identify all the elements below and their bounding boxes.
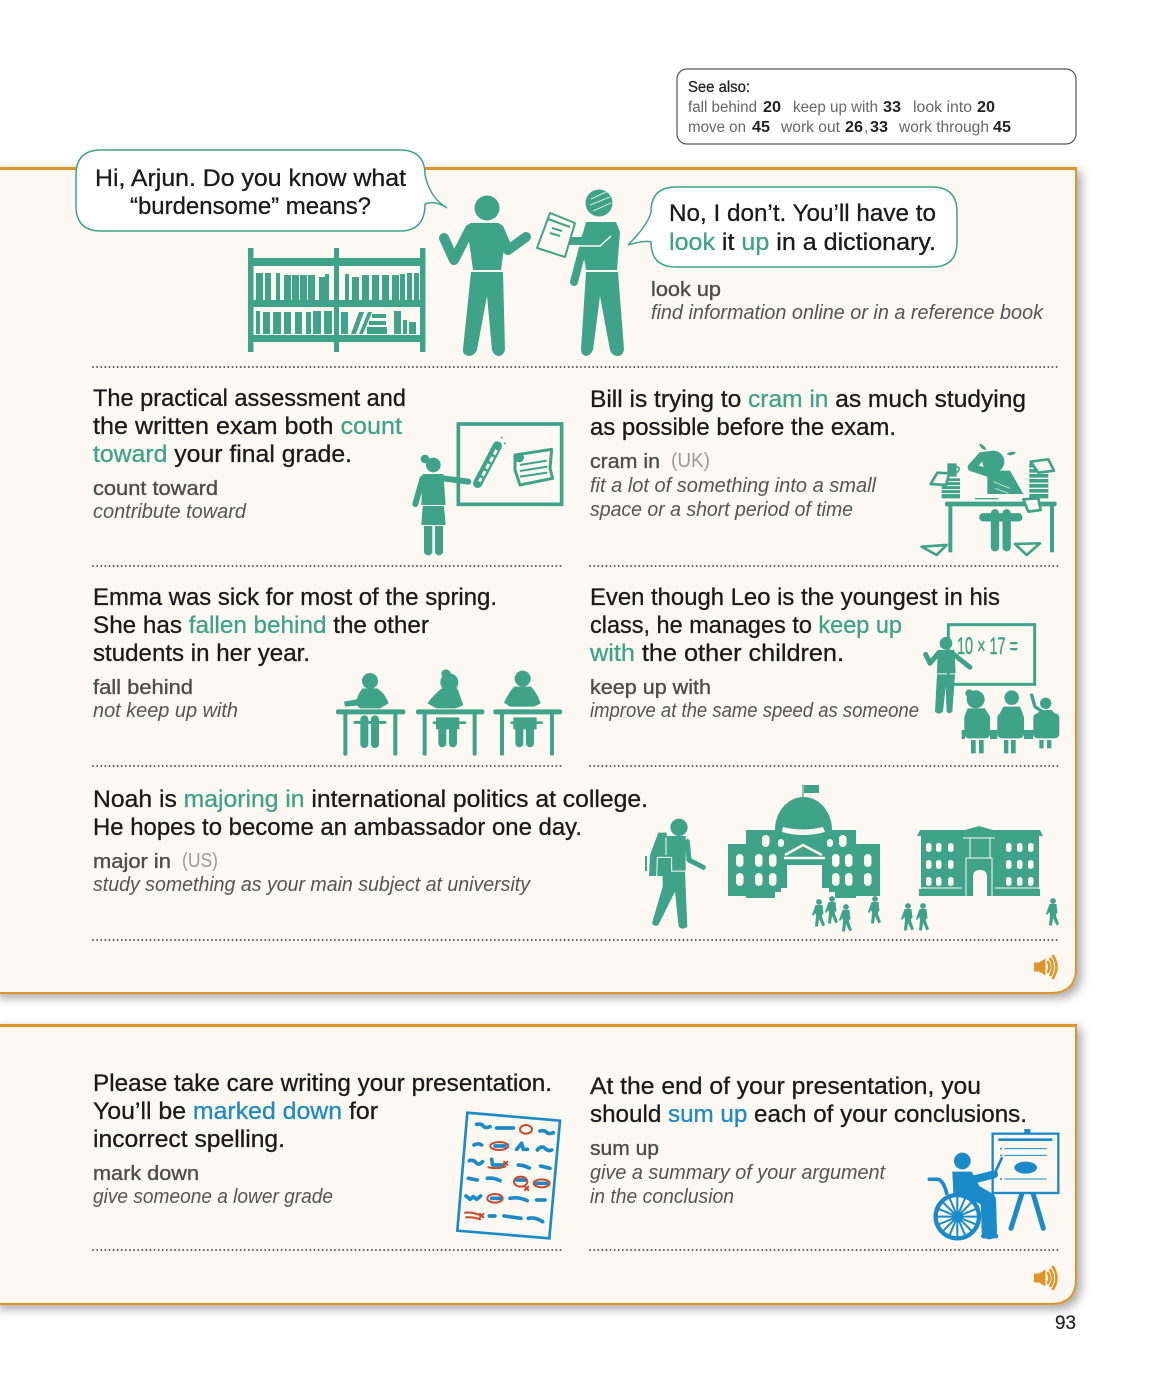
see also box: work through	[898, 119, 989, 136]
text block: keep up with: improve at the same speed as someone	[590, 700, 919, 722]
icon: stressed student at desk	[922, 443, 1057, 555]
text block: keep up with: Even though Leo is the youngest in his	[590, 584, 1000, 611]
text block: sum up: give a summary of your argument	[590, 1162, 886, 1184]
icon: small students walking	[812, 896, 1059, 932]
see also box: fall behind	[688, 99, 757, 116]
text block: sum up: in the conclusion	[590, 1186, 734, 1208]
see also box: 45	[752, 119, 770, 136]
icon: student with backpack	[645, 819, 703, 929]
definition: look up: look up	[651, 279, 721, 301]
speech bubble: Hi, Arjun: “burdensome” means?	[130, 193, 371, 220]
text block: cram in: fit a lot of something into a small	[590, 475, 877, 497]
icon: college building	[917, 826, 1043, 896]
text block: major in	[93, 786, 648, 896]
text block: cram in	[590, 386, 1026, 521]
text block: sum up	[590, 1073, 1027, 1208]
see also box: look into	[913, 99, 972, 116]
text block: keep up with: class, he manages to keep up	[590, 612, 902, 639]
text block: cram in: space or a short period of time	[590, 499, 853, 521]
icon: presenter in wheelchair	[929, 1129, 1058, 1238]
figure: man in turban holding a book	[537, 190, 624, 356]
text block: fall behind: students in her year.	[93, 640, 310, 667]
text block: sum up: sum up	[590, 1138, 659, 1160]
icon: classroom with teacher at the board: 10 × 17 =	[957, 633, 1018, 660]
see also box: 20	[977, 99, 995, 116]
speech bubble: Hi, Arjun: Hi, Arjun. Do you know what	[95, 165, 406, 192]
see also box: 33	[883, 99, 901, 116]
icon: domed university building	[728, 785, 880, 898]
text block: keep up with: with the other children.	[589, 640, 844, 667]
text block: fall behind: Emma was sick for most of the spring.	[93, 584, 497, 611]
text block: count toward: toward your final grade.	[93, 441, 352, 468]
text block: major in: Noah is majoring in international politics at college.	[93, 786, 648, 813]
icon: speaker audio blue section	[1034, 1267, 1056, 1289]
see also box: 26	[845, 119, 863, 136]
panel: green section top rule	[0, 167, 1076, 170]
panel: green section background	[0, 168, 1076, 993]
text block: mark down: give someone a lower grade	[93, 1186, 333, 1208]
icon: marked paper	[457, 1113, 560, 1238]
icon: bookshelf	[248, 248, 426, 352]
text block: major in: (US)	[182, 850, 218, 872]
text block: count toward: The practical assessment and	[93, 385, 406, 412]
figure: man with raised arms	[444, 196, 526, 356]
text block: mark down	[93, 1070, 552, 1208]
see also box: work out	[780, 119, 841, 136]
text block: cram in: Bill is trying to cram in as much studying	[590, 386, 1026, 413]
text block: cram in: (UK)	[671, 450, 710, 472]
text block: major in: He hopes to become an ambassador one day.	[93, 814, 582, 841]
text block: keep up with	[589, 584, 1000, 722]
definition: look up	[651, 279, 1044, 324]
text block: sum up: should sum up each of your conclusions.	[590, 1101, 1027, 1128]
icon: teacher pointing at board	[415, 424, 562, 555]
icon: three students at desks	[336, 669, 562, 756]
text block: mark down: incorrect spelling.	[93, 1126, 285, 1153]
page number: 93	[1055, 1312, 1076, 1334]
text block: cram in: cram in	[590, 451, 660, 473]
text block: major in: major in	[93, 851, 171, 873]
text block: count toward: count toward	[93, 478, 218, 500]
text block: count toward	[93, 385, 406, 523]
text block: mark down: You’ll be marked down for	[93, 1098, 378, 1125]
panel: blue section top rule	[0, 1024, 1076, 1027]
see also box: 20	[763, 99, 781, 116]
text block: mark down: mark down	[93, 1163, 199, 1185]
text block: keep up with: keep up with	[590, 677, 711, 699]
text block: major in: study something as your main subject at university	[93, 874, 531, 896]
text block: count toward: contribute toward	[93, 501, 247, 523]
panel: blue section background	[0, 1025, 1076, 1304]
text block: fall behind: fall behind	[93, 677, 193, 699]
speech bubble: No, I don't: look it up in a dictionary.	[669, 229, 936, 256]
text block: sum up: At the end of your presentation, you	[590, 1073, 981, 1100]
speech bubble: Hi, Arjun	[76, 150, 447, 231]
text block: cram in: as possible before the exam.	[590, 414, 896, 441]
see also box	[677, 69, 1076, 144]
see also box: 45	[993, 119, 1011, 136]
text block: fall behind	[93, 584, 497, 722]
see also box: move on	[688, 119, 746, 136]
icon: classroom with teacher at the board	[926, 625, 1059, 753]
see also box: keep up with	[793, 99, 878, 116]
text block: mark down: Please take care writing your presentation.	[93, 1070, 552, 1097]
speech bubble: No, I don't	[628, 187, 957, 267]
see also box: See also:	[688, 79, 750, 96]
see also box: ,	[864, 119, 868, 136]
text block: fall behind: not keep up with	[93, 700, 238, 722]
text block: count toward: the written exam both count	[93, 413, 402, 440]
speech bubble: No, I don't: No, I don’t. You’ll have to	[669, 200, 936, 227]
text block: fall behind: She has fallen behind the other	[93, 612, 429, 639]
see also box: 33	[870, 119, 888, 136]
definition: look up: find information online or in a reference book	[651, 302, 1044, 324]
icon: speaker audio green section	[1034, 956, 1056, 978]
